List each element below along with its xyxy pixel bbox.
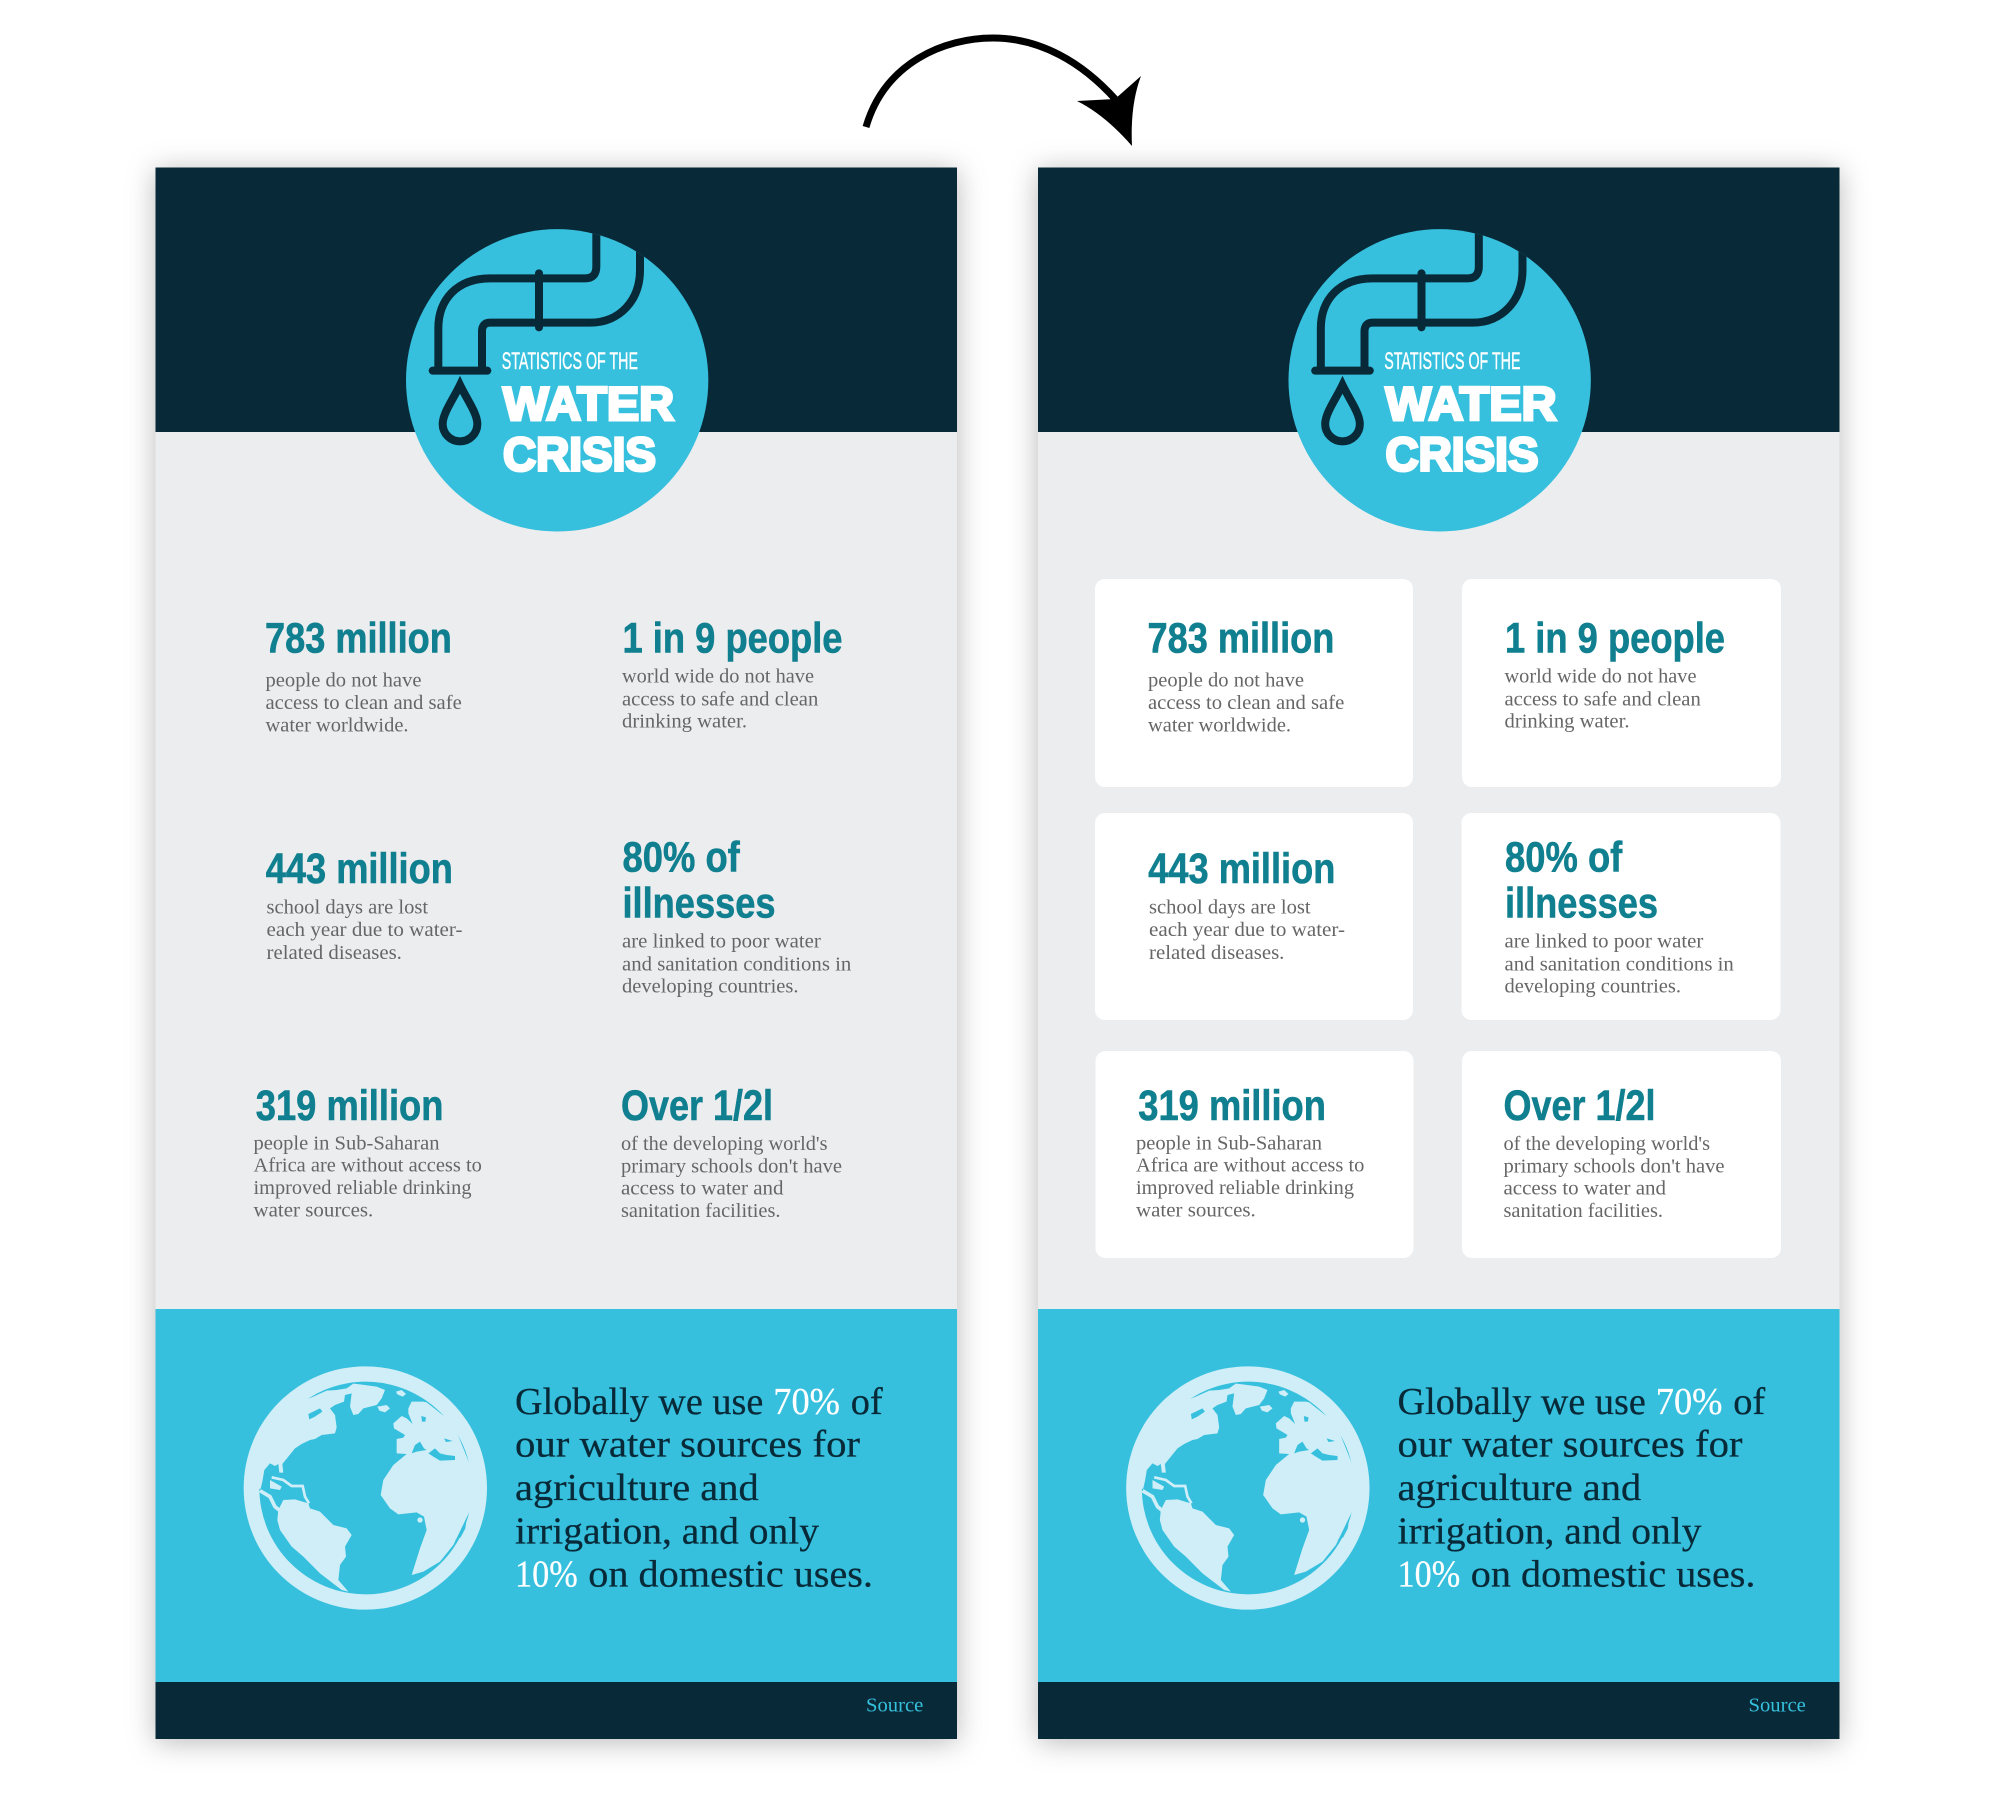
stat: 1 in 9 people: access to safe and clean (622, 688, 818, 710)
panel background and shadow (156, 168, 957, 1739)
card: 1 in 9 people (1462, 579, 1781, 787)
card: Over 1/2l: access to water and (1504, 1178, 1666, 1200)
card: 1 in 9 people: access to safe and clean (1504, 688, 1701, 710)
stat: 1 in 9 people: world wide do not have (622, 666, 814, 688)
card: 443 million (1095, 813, 1413, 1020)
stat: 80% of illnesses (622, 834, 851, 998)
teal band (1038, 1309, 1840, 1682)
stat: 783 million: access to clean and safe (266, 692, 462, 714)
card: Over 1/2l: of the developing world's (1504, 1133, 1710, 1155)
card: 319 million (1096, 1051, 1414, 1258)
card: 783 million: access to clean and safe (1148, 692, 1344, 714)
stat: Over 1/2l: primary schools don't have (621, 1155, 842, 1177)
callout text: water use: agriculture and (1398, 1467, 1641, 1509)
icon: globe (244, 1366, 487, 1610)
stat: Over 1/2l (621, 1082, 842, 1222)
stat: Over 1/2l: access to water and (621, 1178, 784, 1200)
stat: 319 million: people in Sub-Saharan (254, 1132, 440, 1154)
stat: 783 million: 783 million (265, 615, 452, 663)
logo badge: pipe, drop and title: CRISIS (503, 428, 656, 480)
card: 443 million: related diseases. (1149, 942, 1284, 964)
callout text: water use: on domestic uses. (588, 1554, 873, 1596)
stat: 1 in 9 people: 1 in 9 people (622, 615, 842, 663)
stat: Over 1/2l: of the developing world's (621, 1133, 828, 1155)
card: Over 1/2l (1462, 1051, 1781, 1258)
callout text: water use: our water sources for (1398, 1424, 1743, 1466)
stat: 783 million (265, 615, 462, 737)
callout text: water use: on domestic uses. (1471, 1554, 1756, 1596)
card: 80% of illnesses: 80% of (1505, 834, 1623, 882)
stat: 443 million: each year due to water- (266, 919, 463, 941)
card: 80% of illnesses: illnesses (1505, 880, 1658, 928)
stat: 1 in 9 people (622, 615, 842, 733)
source link: Source (866, 1695, 923, 1717)
stat: 443 million: 443 million (266, 845, 453, 893)
callout text: water use: of (1733, 1381, 1765, 1423)
card: 783 million: people do not have (1148, 670, 1304, 692)
stat: Over 1/2l: sanitation facilities. (621, 1200, 780, 1222)
callout text: water use: Globally we use (515, 1381, 763, 1423)
stat: 319 million (254, 1082, 482, 1221)
footer bar (156, 1682, 957, 1739)
card: Over 1/2l: primary schools don't have (1504, 1155, 1724, 1177)
card: 319 million: Africa are without access to (1136, 1155, 1364, 1177)
logo badge: pipe, drop and title (1288, 225, 1591, 531)
stat: 319 million: improved reliable drinking (254, 1177, 472, 1199)
callout text: water use: 70% (1656, 1381, 1722, 1423)
card: 1 in 9 people: drinking water. (1504, 711, 1630, 733)
card: 319 million: improved reliable drinking (1136, 1177, 1354, 1199)
logo badge: pipe, drop and title (406, 225, 708, 531)
card: Over 1/2l: sanitation facilities. (1504, 1200, 1663, 1222)
callout text: water use (1398, 1381, 1765, 1596)
stat: 443 million: school days are lost (266, 896, 428, 918)
logo badge: pipe, drop and title: WATER (503, 377, 674, 430)
stat: 319 million: Africa are without access to (254, 1155, 482, 1177)
stat: 80% of illnesses: developing countries. (622, 976, 798, 998)
logo badge: pipe, drop and title: STATISTICS OF THE (502, 348, 638, 375)
icon: globe (1126, 1366, 1369, 1610)
card: 80% of illnesses: are linked to poor water (1504, 931, 1703, 953)
callout text: water use: irrigation, and only (1398, 1510, 1702, 1552)
header band (156, 168, 957, 432)
stat: 443 million (266, 845, 463, 964)
callout text: water use: agriculture and (515, 1467, 759, 1509)
card: 80% of illnesses (1462, 813, 1780, 1020)
logo badge: pipe, drop and title: WATER (1386, 377, 1556, 430)
card: 443 million: 443 million (1148, 845, 1335, 893)
stat: 80% of illnesses: and sanitation conditions in (622, 953, 851, 975)
panel background and shadow (1038, 168, 1840, 1739)
stat: 80% of illnesses: are linked to poor water (622, 931, 821, 953)
card: 783 million: water worldwide. (1148, 715, 1291, 737)
stat: 783 million: water worldwide. (266, 715, 408, 737)
callout text: water use (515, 1381, 883, 1596)
callout text: water use: irrigation, and only (515, 1510, 820, 1552)
panel: left infographic without cards (156, 168, 957, 1739)
stat: 443 million: related diseases. (266, 942, 402, 964)
card: 80% of illnesses: and sanitation conditions in (1504, 953, 1734, 975)
stat: 319 million: water sources. (254, 1199, 373, 1221)
teal band (156, 1309, 957, 1682)
card: 319 million: water sources. (1136, 1199, 1256, 1221)
callout text: water use: Globally we use (1398, 1381, 1646, 1423)
stat: Over 1/2l: Over 1/2l (621, 1082, 773, 1130)
header band (1038, 168, 1840, 432)
card: Over 1/2l: Over 1/2l (1504, 1082, 1656, 1130)
card: 783 million (1095, 579, 1413, 787)
card: 1 in 9 people: world wide do not have (1504, 666, 1696, 688)
stat: 80% of illnesses: 80% of (622, 834, 740, 882)
callout text: water use: 70% (773, 1381, 840, 1423)
card: 783 million: 783 million (1148, 615, 1334, 663)
card: 319 million: people in Sub-Saharan (1136, 1132, 1322, 1154)
callout text: water use: our water sources for (515, 1424, 860, 1466)
card: 1 in 9 people: 1 in 9 people (1505, 615, 1725, 663)
card: 443 million: each year due to water- (1149, 919, 1345, 941)
logo badge: pipe, drop and title: CRISIS (1386, 428, 1538, 480)
stat: 1 in 9 people: drinking water. (622, 711, 747, 733)
source link: Source (1748, 1695, 1806, 1717)
callout text: water use: 10% (515, 1554, 578, 1596)
arrow: curved from left panel to right panel (866, 38, 1141, 146)
footer bar (1038, 1682, 1840, 1739)
card: 80% of illnesses: developing countries. (1504, 976, 1681, 998)
stat: 783 million: people do not have (266, 670, 422, 692)
stat: 319 million: 319 million (256, 1082, 443, 1130)
card: 443 million: school days are lost (1149, 896, 1311, 918)
logo badge: pipe, drop and title: STATISTICS OF THE (1384, 348, 1520, 375)
callout text: water use: of (851, 1381, 883, 1423)
stat: 80% of illnesses: illnesses (622, 880, 776, 928)
card: 319 million: 319 million (1138, 1082, 1326, 1130)
callout text: water use: 10% (1398, 1554, 1460, 1596)
panel: right infographic with white cards (1038, 168, 1840, 1739)
